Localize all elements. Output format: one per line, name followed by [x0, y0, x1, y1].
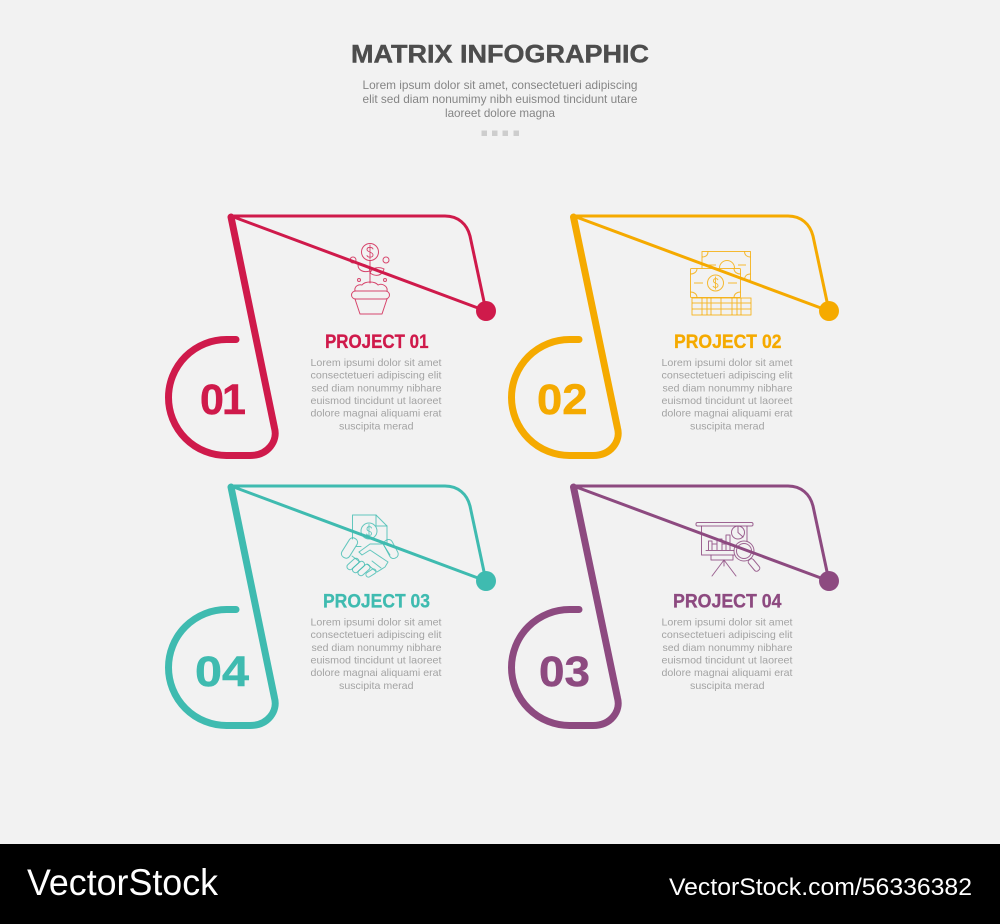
thick stem and bowl [168, 217, 275, 456]
panel: project 03 (bottom right, number 03, heading 04) [512, 486, 839, 726]
end dot [819, 571, 839, 591]
thick stem and bowl [512, 487, 618, 726]
heading: project 04: PROJECT 04 [673, 592, 782, 612]
diagonal line [231, 216, 486, 311]
body text 02: dolore magnai aliquami erat [662, 408, 793, 420]
body text 04: consectetueri adipiscing elit [662, 629, 793, 641]
body text 04: euismod tincidunt ut laoreet [662, 654, 793, 666]
body text 02: euismod tincidunt ut laoreet [662, 395, 793, 407]
number 02: 02 [537, 376, 588, 424]
intro text block [362, 78, 638, 120]
body text 04: Lorem ipsumi dolor sit amet [662, 616, 793, 628]
body text 01: sed diam nonummy nibhare [312, 382, 442, 394]
body text 03: dolore magnai aliquami erat [310, 667, 442, 679]
body text 02: Lorem ipsumi dolor sit amet [662, 357, 793, 369]
icon: handshake and document [340, 515, 400, 578]
watermark url text: VectorStock.com/56336382 [669, 874, 972, 901]
diagonal line [574, 216, 829, 311]
frame outline [231, 216, 486, 311]
body text 02 [662, 357, 793, 432]
intro text block: elit sed diam nonumimy nibh euismod tincidunt utare [362, 92, 638, 106]
panel: project 04 (bottom left, number 04, heading 03) [168, 486, 496, 726]
icon: banknotes and coins [690, 252, 751, 315]
end dot [476, 301, 496, 321]
body text 03: euismod tincidunt ut laoreet [310, 654, 442, 666]
thick stem and bowl [512, 217, 618, 456]
diagonal line [574, 486, 829, 581]
panel: project 02 [512, 216, 839, 456]
body text 01: euismod tincidunt ut laoreet [310, 395, 442, 407]
diagonal line [231, 486, 486, 581]
body text 03: Lorem ipsumi dolor sit amet [310, 616, 442, 628]
body text 02: consectetueri adipiscing elit [662, 370, 793, 382]
panel: project 01 [168, 216, 496, 456]
icon: presentation board with magnifier [696, 522, 761, 576]
body text 02: suscipita merad [690, 420, 765, 432]
body text 01: consectetueri adipiscing elit [310, 370, 442, 382]
body text 01: Lorem ipsumi dolor sit amet [310, 357, 442, 369]
body text 01 [310, 357, 442, 432]
body text 03 [310, 616, 442, 692]
heading: project 03: PROJECT 03 [323, 592, 430, 612]
heading: project 02: PROJECT 02 [674, 332, 782, 353]
body text 04: sed diam nonummy nibhare [662, 642, 793, 654]
intro text block: Lorem ipsum dolor sit amet, consectetueri adipiscing [362, 78, 638, 92]
body text 02: sed diam nonummy nibhare [662, 382, 793, 394]
watermark band [0, 844, 1000, 924]
body text 03: consectetueri adipiscing elit [310, 629, 442, 641]
number 03: 03 [539, 648, 590, 696]
thick stem and bowl [168, 487, 275, 726]
frame outline [574, 486, 829, 581]
body text 01: suscipita merad [339, 420, 414, 432]
title: MATRIX INFOGRAPHIC [351, 40, 649, 68]
frame outline [231, 486, 486, 581]
body text 04 [662, 616, 793, 692]
icon: money plant cupcake [350, 244, 390, 314]
frame outline [574, 216, 829, 311]
body text 03: suscipita merad [339, 680, 414, 692]
body text 04: suscipita merad [690, 680, 765, 692]
end dot [476, 571, 496, 591]
watermark logo text: VectorStock [27, 862, 218, 903]
intro text block: laoreet dolore magna [445, 106, 555, 120]
body text 04: dolore magnai aliquami erat [662, 667, 793, 679]
number 01: 01 [200, 376, 246, 424]
body text 01: dolore magnai aliquami erat [310, 408, 442, 420]
number 04: 04 [195, 648, 249, 696]
pagination dots [482, 130, 519, 136]
body text 03: sed diam nonummy nibhare [312, 642, 442, 654]
heading: project 01: PROJECT 01 [325, 332, 429, 353]
end dot [819, 301, 839, 321]
